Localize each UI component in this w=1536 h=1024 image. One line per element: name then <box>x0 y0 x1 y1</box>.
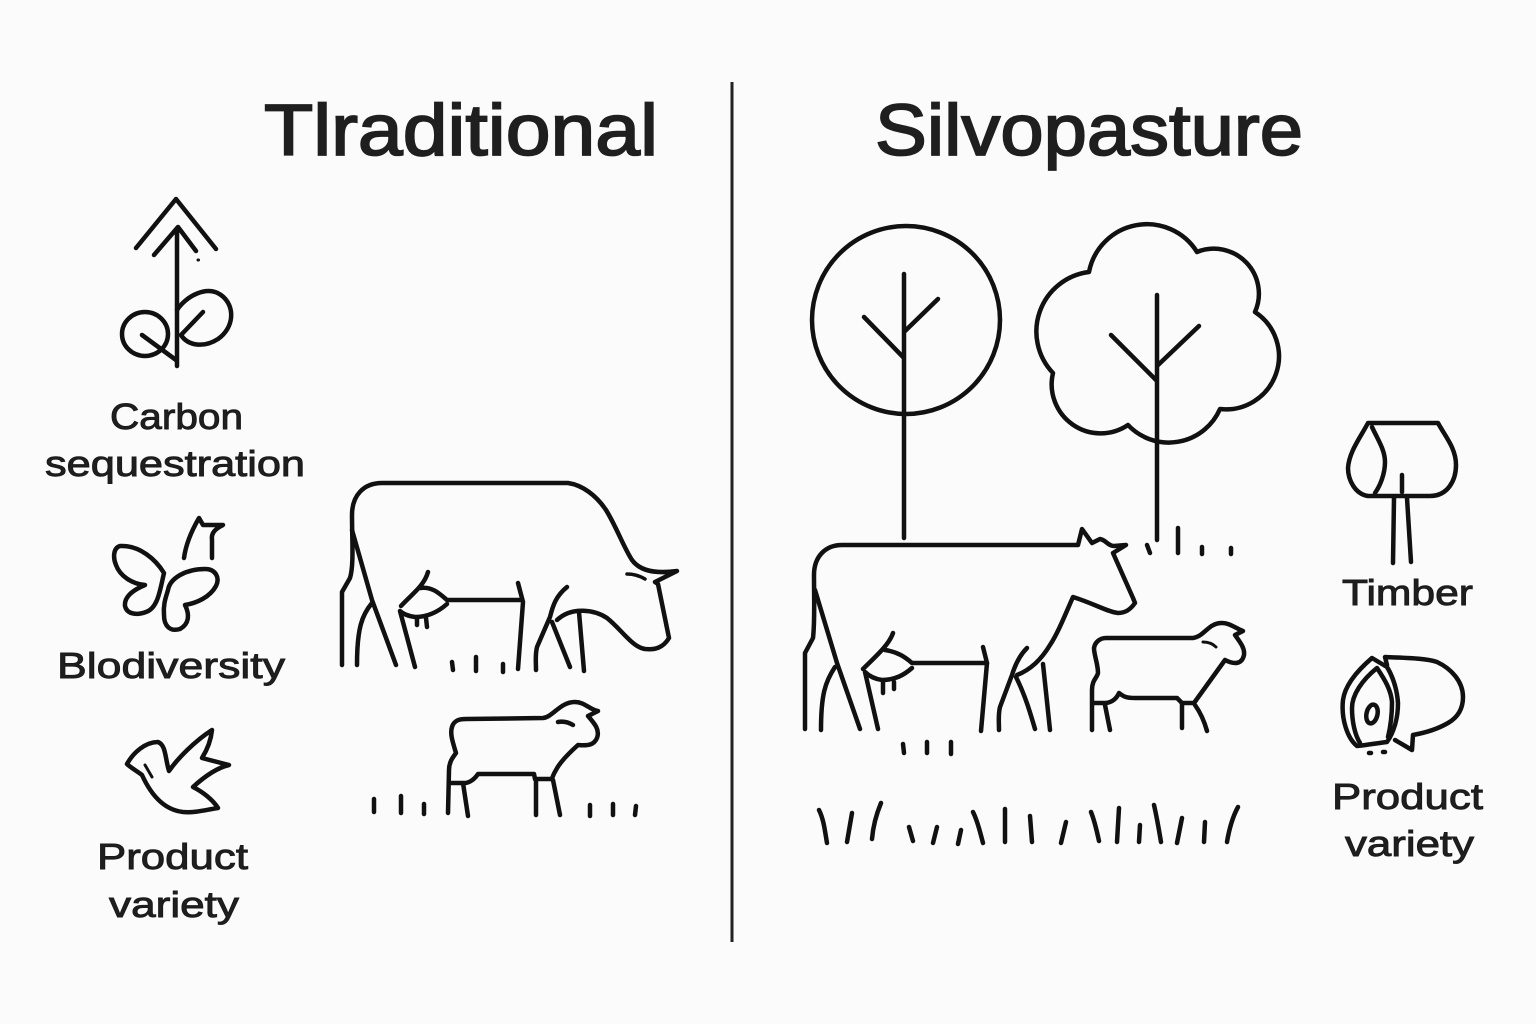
icon: bird <box>127 730 229 812</box>
label: product variety right: variety <box>1345 823 1474 864</box>
title: Silvopasture: Silvopasture <box>875 91 1303 171</box>
label: timber: Timber <box>1342 572 1473 613</box>
label: product variety right: Product <box>1332 776 1483 817</box>
icon: butterfly <box>114 518 223 630</box>
label: carbon sequestration: sequestration <box>45 443 305 484</box>
label: product variety left: variety <box>109 884 239 925</box>
label: product variety left <box>97 836 248 925</box>
illustration: grazing cow <box>342 483 677 671</box>
illustration: sheep right <box>1092 623 1244 731</box>
tree: cloud canopy <box>1036 224 1279 540</box>
grass under right cow <box>903 742 951 754</box>
illustration: cow right <box>805 529 1135 731</box>
grass beside trees <box>1147 528 1231 554</box>
label: carbon sequestration: Carbon <box>110 396 243 437</box>
long grass row <box>819 803 1238 844</box>
icon: carbon sequestration arrow with leaves <box>122 199 231 366</box>
illustration: sheep left <box>448 702 598 816</box>
icon: product variety, cut fruit <box>1343 657 1463 753</box>
icon: timber <box>1348 423 1456 563</box>
center divider <box>730 82 734 942</box>
label: product variety left: Product <box>97 836 248 877</box>
label: product variety right <box>1332 776 1483 864</box>
label: biodiversity: Blodiversity <box>57 645 285 686</box>
grass under cow <box>452 657 503 672</box>
label: carbon sequestration <box>45 396 305 484</box>
title: Traditional: Tlraditional <box>264 91 658 171</box>
grass around sheep <box>374 796 636 816</box>
tree: round <box>812 226 1000 538</box>
